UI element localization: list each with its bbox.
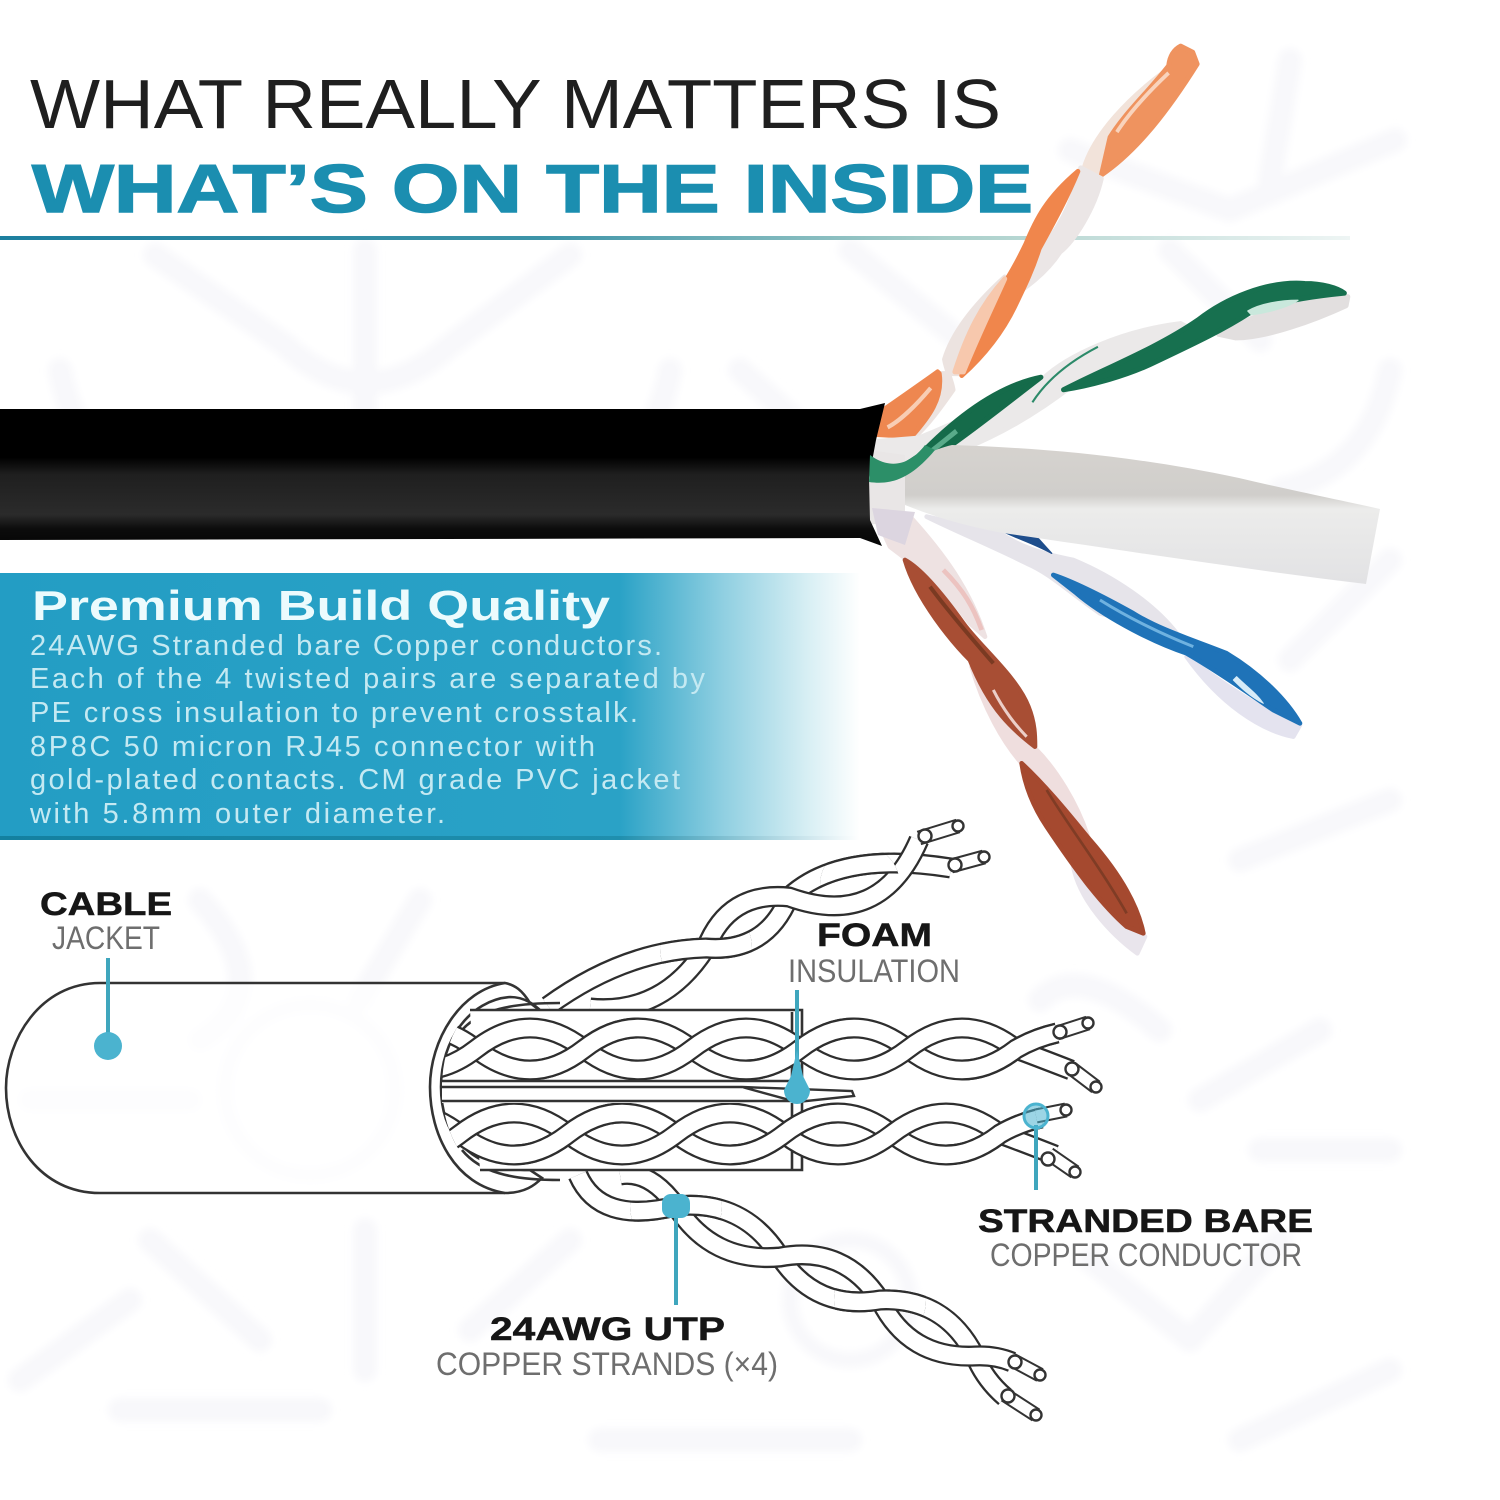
panel heading: Premium Build Quality [32, 582, 611, 629]
lower twisted pair [352, 1113, 1055, 1155]
photo: brown twisted pair [873, 510, 1145, 953]
photo: orange twisted pair [877, 46, 1197, 436]
callout: cable jacket: JACKET [52, 920, 160, 956]
panel body text: PE cross insulation to prevent crosstalk. [30, 697, 638, 729]
photo: blue twisted pair [927, 517, 1300, 737]
panel body text: 24AWG Stranded bare Copper conductors. [30, 630, 662, 662]
callout: cable jacket [40, 886, 172, 1060]
upper twisted pair [368, 1028, 1071, 1070]
callout: stranded bare copper conductor: COPPER CONDUCTOR [990, 1237, 1302, 1273]
panel body text: with 5.8mm outer diameter. [29, 798, 445, 830]
callout: foam insulation: FOAM [817, 917, 932, 953]
panel body text: gold-plated contacts. CM grade PVC jacket [30, 764, 680, 796]
conductor ends [918, 820, 1102, 1420]
cross separator [442, 1080, 854, 1103]
photo: black cable jacket [0, 403, 935, 546]
callout: 24AWG UTP copper strands: 24AWG UTP [490, 1311, 725, 1347]
top twisted pair [548, 840, 951, 1009]
photo: white cross separator [870, 445, 1380, 584]
callout: stranded bare copper conductor [978, 1104, 1313, 1273]
callout: 24AWG UTP copper strands [436, 1194, 778, 1382]
panel body text: 8P8C 50 micron RJ45 connector with [30, 731, 595, 763]
panel body text: Each of the 4 twisted pairs are separated by [30, 663, 706, 695]
jacket end ring [430, 983, 560, 1193]
jacket outline [6, 983, 505, 1193]
callout: foam insulation [784, 917, 960, 1104]
bottom twisted pair [578, 1174, 1012, 1397]
foam insulation [470, 1010, 802, 1170]
callout: foam insulation: INSULATION [788, 953, 960, 989]
callout: stranded bare copper conductor: STRANDED BARE [978, 1203, 1313, 1239]
panel: premium build quality [0, 573, 860, 840]
callout: cable jacket: CABLE [40, 886, 172, 922]
title: what's on the inside: WHAT’S ON THE INSIDE [32, 151, 1033, 227]
photo: green twisted pair [869, 283, 1348, 490]
diagram: cable cutaway line drawing [6, 820, 1102, 1420]
callout: 24AWG UTP copper strands: COPPER STRANDS (×4) [436, 1346, 778, 1382]
title: what really matters is: WHAT REALLY MATTERS IS [30, 65, 1001, 143]
panel body text [29, 630, 706, 830]
